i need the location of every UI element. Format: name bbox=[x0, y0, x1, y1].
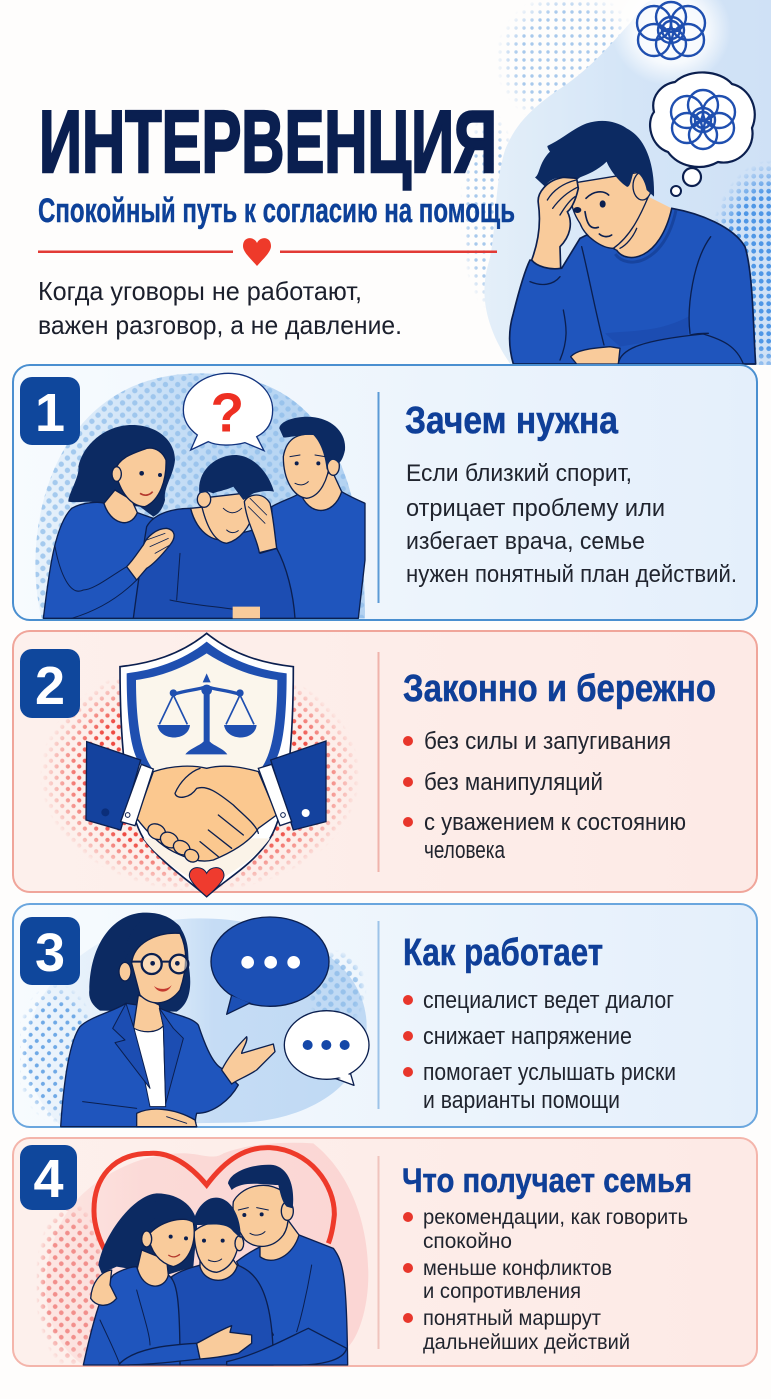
icon: scales bbox=[157, 673, 257, 754]
bullet list: снижает напряжение bbox=[423, 1023, 632, 1050]
body text bbox=[406, 460, 737, 588]
number badge 4: 4 bbox=[33, 1149, 64, 1209]
body text: избегает врача, семье bbox=[406, 528, 645, 555]
bullet list: с уважением к состоянию bbox=[424, 809, 686, 836]
center man bbox=[127, 455, 295, 618]
body text: Если близкий спорит, bbox=[406, 460, 632, 487]
heading: Зачем нужна bbox=[405, 400, 619, 442]
bullet list: без манипуляций bbox=[424, 769, 603, 796]
panel: 3 how it works bbox=[13, 904, 757, 1127]
bullet list: человека bbox=[424, 837, 506, 864]
panel: 4 what family gets bbox=[13, 1138, 757, 1366]
vertical divider bbox=[378, 392, 380, 603]
bullet list: понятный маршрут bbox=[423, 1307, 601, 1330]
bullet list: спокойно bbox=[423, 1230, 512, 1253]
number badge 1: 1 bbox=[35, 383, 65, 443]
intro text: важен разговор, а не давление. bbox=[38, 310, 402, 340]
mother hair bbox=[98, 1193, 197, 1275]
illustration: shield and handshake bbox=[40, 633, 360, 897]
icon: tangled scribble bbox=[637, 2, 705, 59]
hands and arms bbox=[91, 1265, 347, 1365]
woman bbox=[43, 425, 175, 618]
icon: heart bbox=[189, 868, 224, 897]
bullet list: рекомендации, как говорить bbox=[423, 1206, 688, 1229]
number badge 2 bbox=[20, 649, 80, 718]
bullet list: специалист ведет диалог bbox=[423, 987, 674, 1014]
illustration: worried man bbox=[510, 121, 756, 364]
subtitle: Спокойный путь к согласию на помощь bbox=[38, 192, 515, 230]
father bbox=[227, 1165, 348, 1365]
bullet list: помогает услышать риски bbox=[423, 1059, 676, 1086]
body text: нужен понятный план действий. bbox=[406, 561, 737, 588]
number badge 3: 3 bbox=[35, 923, 65, 983]
number badge 2: 2 bbox=[35, 656, 65, 716]
speech bubble: question: ? bbox=[211, 382, 244, 444]
bullet list: дальнейших действий bbox=[423, 1331, 630, 1354]
bullet list bbox=[403, 728, 686, 864]
title: ИНТЕРВЕНЦИЯ bbox=[39, 92, 497, 191]
right sleeve bbox=[258, 741, 326, 830]
son bbox=[172, 1198, 273, 1365]
intro text bbox=[38, 276, 402, 340]
bullet list: без силы и запугивания bbox=[424, 728, 671, 755]
vertical divider bbox=[378, 1156, 380, 1349]
panel: 2 legally and gently bbox=[13, 631, 757, 897]
left sleeve bbox=[86, 742, 153, 830]
card background bbox=[13, 365, 757, 620]
right man bbox=[272, 417, 365, 618]
number badge 3 bbox=[20, 917, 80, 985]
illustration: family around man bbox=[35, 373, 365, 618]
body text: отрицает проблему или bbox=[406, 495, 665, 522]
heart outline bbox=[94, 1148, 334, 1253]
white speech bubble bbox=[284, 1011, 369, 1085]
thought bubble bbox=[650, 72, 755, 196]
card background bbox=[13, 1138, 757, 1366]
intro text: Когда уговоры не работают, bbox=[38, 276, 362, 306]
bullet list: меньше конфликтов bbox=[423, 1257, 612, 1280]
card background bbox=[13, 904, 757, 1127]
illustration: specialist talking bbox=[20, 913, 369, 1127]
speech bubble: question bbox=[183, 373, 273, 451]
number badge 4 bbox=[20, 1145, 77, 1210]
header panel bbox=[38, 0, 771, 365]
blue speech bubble bbox=[211, 917, 329, 1014]
bullet list bbox=[403, 1206, 688, 1354]
illustration: family hug in heart bbox=[37, 1143, 368, 1365]
vertical divider bbox=[378, 921, 380, 1109]
bullet list bbox=[403, 987, 676, 1114]
heading: Как работает bbox=[403, 932, 603, 974]
bullet list: и сопротивления bbox=[423, 1280, 581, 1303]
vertical divider bbox=[378, 652, 380, 872]
heart divider bbox=[38, 238, 497, 266]
decorative blue splash bbox=[460, 0, 771, 365]
heading: Законно и бережно bbox=[403, 668, 716, 710]
number badge 1 bbox=[20, 377, 80, 445]
panel: 1 why needed bbox=[13, 365, 757, 620]
card background bbox=[13, 631, 757, 892]
bullet list: и варианты помощи bbox=[423, 1087, 620, 1114]
handshake bbox=[137, 766, 277, 865]
heading: Что получает семья bbox=[402, 1162, 692, 1200]
mother bbox=[83, 1198, 197, 1365]
